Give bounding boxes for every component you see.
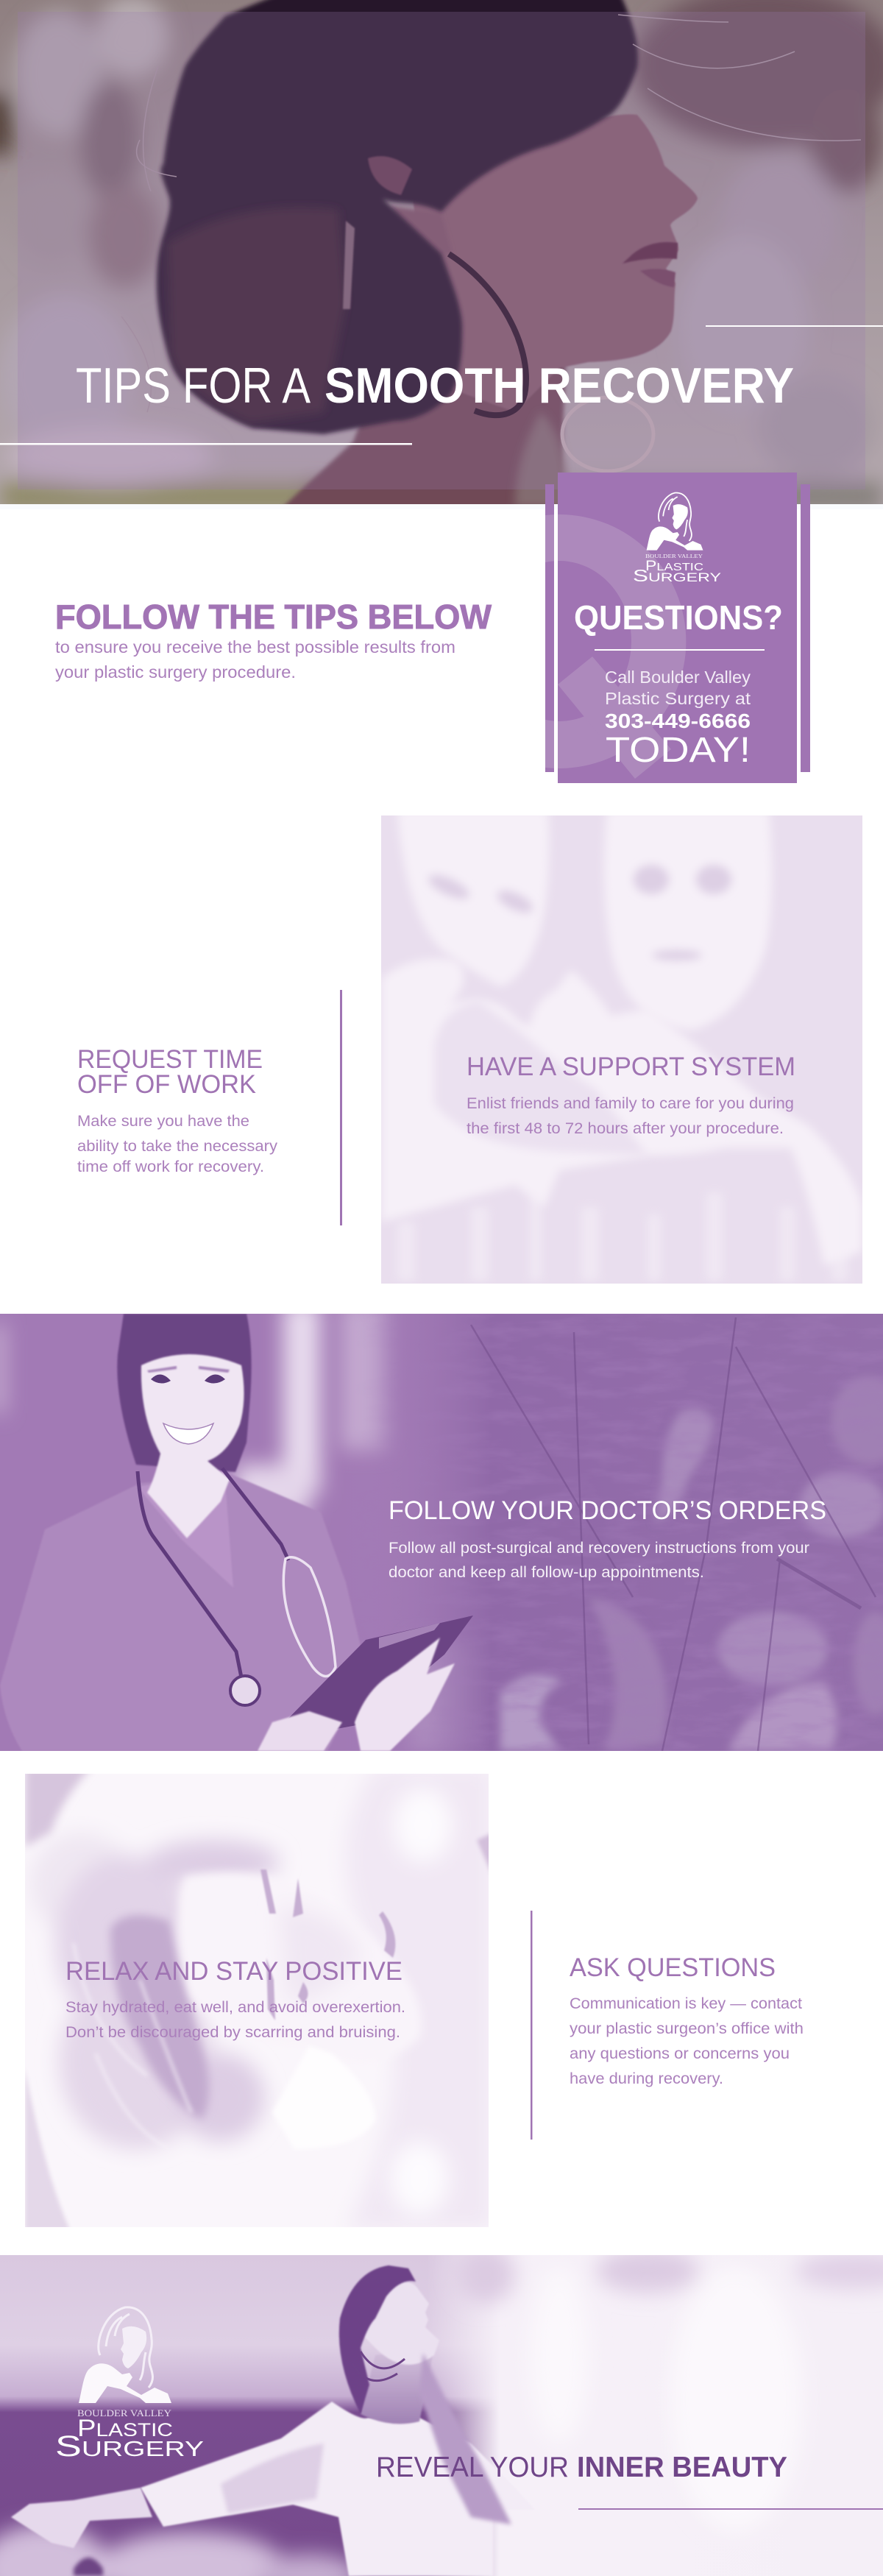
hero title: TIPS FOR A (76, 358, 311, 414)
woman figure (11, 2265, 535, 2576)
intro text: follow the tips below: FOLLOW THE TIPS BELOW (55, 598, 492, 636)
hero title (76, 358, 794, 414)
questions heading: QUESTIONS? (574, 598, 783, 637)
support system heading and text: the first 48 to 72 hours after your procedure. (467, 1120, 784, 1137)
hair (117, 1314, 252, 1472)
tablet (265, 1616, 473, 1742)
tip: request time off of work: ability to take the necessary (77, 1138, 278, 1155)
relax heading and text: RELAX AND STAY POSITIVE (65, 1957, 403, 1986)
stethoscope (138, 1468, 288, 1681)
panel: follow your doctor's orders (0, 1303, 883, 1752)
support system heading and text (467, 1052, 795, 1137)
panel: relax and stay positive (25, 1766, 493, 2230)
panel: have a support system (381, 810, 862, 1284)
tinted overlay panel (18, 12, 865, 489)
tip: request time off of work: time off work for recovery. (77, 1158, 264, 1175)
support system heading and text: HAVE A SUPPORT SYSTEM (467, 1052, 795, 1081)
intro text: follow the tips below: to ensure you receive the best possible results from (55, 637, 455, 657)
forearm and hand (11, 2488, 152, 2548)
tip: request time off of work: OFF OF WORK (77, 1070, 256, 1099)
logo: Boulder Valley Plastic Surgery (633, 493, 721, 585)
doctor's orders heading and text: FOLLOW YOUR DOCTOR’S ORDERS (389, 1496, 826, 1525)
photo of woman with open arms against clouds (0, 2245, 883, 2576)
closing heading: INNER BEAUTY (577, 2452, 787, 2483)
hair (339, 2265, 416, 2414)
nurse figure (0, 1314, 473, 1751)
scrubs (0, 1474, 362, 1751)
logo: Boulder Valley Plastic Surgery: BOULDER VALLEY (645, 553, 703, 559)
logo: Boulder Valley Plastic Surgery white: BOULDER VALLEY (77, 2407, 172, 2418)
tip: request time off of work: Make sure you have the (77, 1113, 249, 1130)
callout: questions box (433, 473, 810, 783)
panel: hero photo and title (0, 0, 883, 512)
call to action text: 303-449-6666 (605, 710, 751, 732)
photo of smiling nurse with tablet over textured background (0, 1303, 883, 1752)
tip: ask questions: Communication is key — contact (570, 1995, 802, 2012)
tip: ask questions (570, 1953, 804, 2087)
relax heading and text: Don’t be discouraged by scarring and bruising. (65, 2024, 400, 2041)
face and neck (141, 1354, 244, 1538)
photo of two women making a heart with hands (381, 810, 862, 1284)
tip: ask questions: any questions or concerns you (570, 2045, 790, 2062)
intro text: follow the tips below: your plastic surgery procedure. (55, 662, 296, 682)
panel: reveal your inner beauty (0, 2245, 883, 2576)
loose strands and earrings (121, 15, 861, 412)
logo: Boulder Valley Plastic Surgery: S URGERY (633, 566, 721, 585)
body and blouse (141, 2402, 535, 2576)
logo: Boulder Valley Plastic Surgery white: S URGERY (55, 2430, 204, 2463)
call to action text: Plastic Surgery at (605, 689, 751, 708)
hero title: SMOOTH RECOVERY (325, 358, 794, 414)
call to action text: Call Boulder Valley (605, 668, 751, 687)
logo: Boulder Valley Plastic Surgery: PLASTIC (645, 559, 703, 574)
neck and shoulder (282, 324, 567, 508)
call to action text (605, 668, 751, 770)
relax heading and text: Stay hydrated, eat well, and avoid overexertion. (65, 1999, 405, 2016)
ear (390, 206, 453, 254)
fleur-de-lis texture (500, 1376, 883, 1751)
pillow (272, 2046, 375, 2149)
icon: awareness ribbon watermark (433, 514, 686, 779)
tip: ask questions: have during recovery. (570, 2070, 723, 2087)
face (178, 1872, 422, 2063)
photo of sleeping woman on pillow (25, 1766, 493, 2230)
face (412, 114, 698, 412)
doctor's orders heading and text: doctor and keep all follow-up appointments. (389, 1564, 704, 1581)
doctor's orders heading and text: Follow all post-surgical and recovery instructions from your (389, 1540, 809, 1557)
tip: ask questions: ASK QUESTIONS (570, 1953, 776, 1982)
hair (29, 1833, 280, 2149)
face (361, 2282, 439, 2365)
logo: Boulder Valley Plastic Surgery white: PLASTIC (77, 2415, 173, 2441)
tip: request time off of work: REQUEST TIME (77, 1045, 263, 1074)
tip: ask questions: your plastic surgeon’s office with (570, 2020, 804, 2037)
hero photo of woman in profile (0, 0, 883, 512)
tip: request time off of work (77, 1045, 278, 1175)
closing heading: REVEAL YOUR (376, 2452, 569, 2483)
doctor's orders heading and text (389, 1496, 826, 1581)
intro text: follow the tips below (55, 598, 492, 682)
relax heading and text (65, 1957, 405, 2041)
icon: woman portrait (647, 493, 703, 551)
hands (355, 1638, 455, 1751)
neck (361, 2348, 434, 2424)
hair (157, 0, 638, 434)
logo: Boulder Valley Plastic Surgery white (55, 2307, 204, 2463)
icon: woman portrait white (79, 2307, 171, 2403)
closing heading (376, 2452, 787, 2483)
call to action text: TODAY! (606, 731, 751, 770)
support system heading and text: Enlist friends and family to care for you during (467, 1095, 794, 1112)
